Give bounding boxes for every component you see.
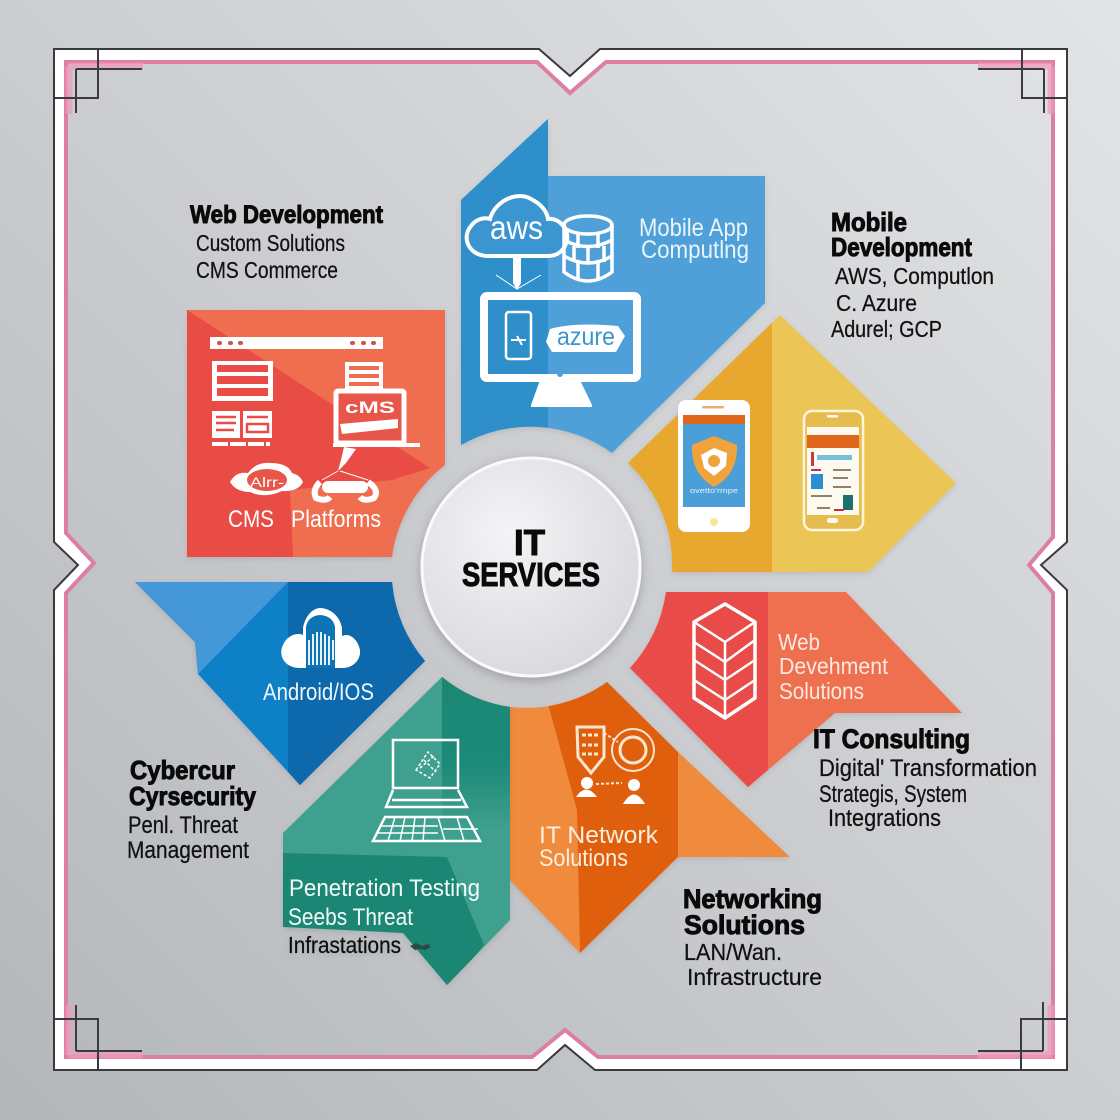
icon: cloud and connector — [230, 463, 376, 500]
icon: arrow down — [496, 257, 541, 290]
text block: mobile development: AWS, Computlon — [835, 263, 994, 289]
icon: two people — [576, 777, 645, 804]
text block: mobile development: Adurel; GCP — [831, 316, 942, 342]
text block: cybersecurity: Cyrsecurity — [129, 781, 256, 811]
icon: monitor — [484, 296, 637, 407]
icon: monitor: azure — [557, 323, 615, 351]
label: CMS platforms: Platforms — [291, 506, 381, 533]
text block: cybersecurity: Management — [127, 837, 249, 864]
text block: web development: Web Development — [190, 201, 384, 229]
label: Android/IOS: Android/IOS — [263, 679, 374, 706]
center hub: IT services — [422, 458, 640, 676]
label: mobile app computing: Computlng — [641, 236, 749, 264]
icon: server stack — [694, 604, 755, 718]
label: penetration testing: Infrastations — [288, 932, 401, 958]
text block: mobile development — [831, 207, 994, 342]
icon: phone with app screen — [804, 411, 863, 530]
center hub: IT services: SERVICES — [462, 556, 600, 593]
icon: shield and gear network — [577, 727, 654, 784]
text block: IT consulting: Strategis, System — [819, 781, 967, 808]
text block: IT consulting: Integrations — [828, 805, 941, 832]
label: web development solutions — [778, 629, 889, 704]
label: web development solutions: Devehment — [779, 653, 889, 679]
panel: mobile apps (yellow) — [620, 310, 956, 580]
text block: mobile development: C. Azure — [836, 290, 917, 316]
text block: mobile development: Development — [831, 232, 972, 262]
text block: web development: CMS Commerce — [196, 257, 338, 283]
panel: web development solutions (coral) — [625, 585, 962, 795]
icon: CMS laptop: cMS — [345, 398, 395, 417]
text block: cybersecurity: Cybercur — [130, 755, 235, 785]
panel: penetration testing (teal) — [283, 670, 515, 990]
icon: phone with shield: ovetto'rmpe — [690, 488, 738, 495]
center hub: IT services: IT — [514, 522, 545, 563]
label: penetration testing — [288, 875, 480, 958]
label: CMS platforms — [228, 506, 381, 533]
icon: cloud with headphones — [281, 608, 360, 668]
label: penetration testing: Penetration Testing — [289, 875, 480, 902]
text block: IT consulting — [813, 724, 1037, 832]
icon: CMS laptop — [333, 362, 420, 471]
text block: cybersecurity: Penl. Threat — [128, 812, 238, 839]
icon: aws cloud — [467, 196, 567, 256]
label: mobile app computing: Mobile App — [639, 214, 748, 242]
label: web development solutions: Solutions — [779, 678, 864, 704]
text block: IT consulting: IT Consulting — [813, 724, 970, 754]
text block: mobile development: Mobile — [831, 207, 907, 237]
label: penetration testing: Seebs Threat — [288, 904, 413, 931]
text block: networking solutions: Solutions — [684, 910, 805, 940]
panel: android/iOS (blue) — [135, 580, 438, 790]
panel: CMS platforms (red) — [187, 310, 445, 557]
icon: database — [564, 216, 612, 281]
text block: networking solutions: Networking — [683, 884, 822, 914]
icon: aws cloud: aws — [490, 209, 543, 246]
icon: cloud and connector: Alrr- — [250, 474, 284, 490]
panel: IT network solutions (orange) — [510, 675, 790, 953]
label: CMS platforms: CMS — [228, 506, 274, 533]
label: IT network solutions — [539, 822, 659, 872]
icon: content forms — [212, 361, 273, 444]
text block: IT consulting: Digital' Transformation — [819, 755, 1037, 782]
label: IT network solutions: Solutions — [539, 845, 628, 872]
text block: web development: Custom Solutions — [196, 230, 345, 256]
panel: cloud computing (top blue) — [461, 110, 765, 460]
text block: web development — [190, 201, 384, 283]
icon: laptop with keyboard — [373, 740, 480, 841]
label: mobile app computing — [639, 214, 749, 264]
icon: browser bar — [210, 337, 383, 349]
text block: networking solutions: Infrastructure — [687, 964, 822, 990]
label: web development solutions: Web — [778, 629, 820, 655]
icon: phone with shield — [678, 400, 750, 532]
text block: networking solutions: LAN/Wan. — [684, 939, 782, 965]
label: IT network solutions: IT Network — [539, 822, 659, 849]
text block: networking solutions — [683, 884, 822, 990]
text block: cybersecurity — [127, 755, 256, 864]
